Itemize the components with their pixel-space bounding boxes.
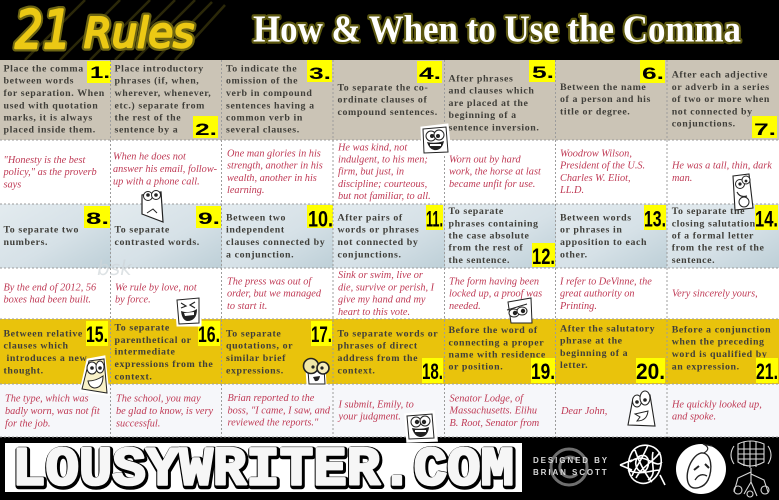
icon: tall face, rule 7 [733, 174, 753, 210]
rule 19 example: Massachusetts. Elihu [448, 406, 537, 417]
rule 2 text: etc.) separate from [114, 100, 205, 111]
rule 12 text: phrases containing [448, 218, 539, 229]
rule 2 example: answer his email, follow- [113, 164, 218, 175]
rule 4 text: To separate the co- [338, 82, 428, 93]
rule 11 text: After pairs of [338, 212, 403, 223]
rule 20 panel [556, 319, 667, 437]
rule 14 text: from the rest of the [672, 243, 765, 254]
rule 12 example: The form having been [449, 276, 539, 287]
rule 11 panel [333, 204, 445, 319]
title: 21 Rules: 21 [15, 0, 71, 61]
rule 6 example: Woodrow Wilson, [560, 148, 632, 159]
rule 3 example: learning. [227, 185, 264, 196]
number 2 badge [193, 116, 218, 139]
rule 6 text: of a person and his [560, 94, 651, 105]
rule 6 example: LL.D. [559, 185, 584, 196]
rule 15 text: introduces a new [6, 353, 88, 364]
rule 16 example: The school, you may [116, 394, 201, 405]
rule 17 example: boss, "I came, I saw, and [228, 405, 331, 416]
icon: scribble ball [620, 445, 665, 485]
rule 19 text: or position. [448, 362, 503, 373]
rule 1 example: "Honesty is the best [4, 155, 86, 166]
rule 16 text: intermediate [114, 347, 175, 358]
icon: copyright symbol [551, 449, 587, 485]
rule 17 text: expressions. [226, 365, 284, 376]
rule 12 example: locked up, a proof was [449, 289, 542, 300]
rule 16 text: expressions from the [114, 359, 213, 370]
rule 5 text: After phrases [448, 74, 513, 85]
rule 15 example: The type, which was [5, 394, 89, 405]
rule 17 text: similar brief [226, 353, 286, 364]
rule 9 panel [111, 204, 222, 319]
number 9 badge: 9. [198, 210, 220, 228]
rule 18 example: your judgment. [338, 412, 401, 423]
rule 5 panel [445, 60, 556, 204]
rule 4 panel [333, 60, 445, 204]
rule 10 example: The press was out of [227, 276, 313, 287]
rule 20 text: letter. [560, 360, 588, 371]
rule 5 text: are placed at the [448, 98, 528, 109]
rule 12 panel [445, 204, 556, 319]
number 15 badge: 15. [86, 322, 108, 347]
rule 1 example: policy," as the proverb [2, 167, 97, 178]
rule 21 text: when the preceding [672, 337, 765, 348]
rule 2 text: wherever, whenever, [114, 88, 211, 99]
rule 5 text: and clauses which [448, 86, 534, 97]
rule 11 example: Sink or swim, live or [338, 270, 424, 281]
decorative streaks behind title [25, 0, 225, 60]
rule 17 panel [222, 319, 333, 437]
rule 7 example: He was a tall, thin, dark [671, 161, 772, 172]
rule 16 example: be glad to know, is very [116, 406, 213, 417]
rule 3 example: strength, another in his [227, 161, 323, 172]
rule 13 text: or phrases in [560, 225, 622, 236]
icon: smiling face, rule 18 [406, 412, 436, 441]
rule 5 example: became unfit for use. [449, 179, 535, 190]
rule 15 example: for the job. [5, 418, 50, 429]
rule 14 text: closing salutation [672, 218, 756, 229]
rule 3 text: verb in compound [226, 88, 312, 99]
number 17 badge: 17. [311, 322, 332, 347]
rule 1 text: used with quotation [4, 100, 98, 111]
icon: smiling face, rule 4 [422, 125, 450, 155]
rule 12 text: from the rest of [448, 243, 523, 254]
rule 7 text: or adverb in a series [672, 82, 770, 93]
rule 4 example: indulgent, to his men; [338, 154, 428, 165]
number 1 badge [87, 61, 111, 83]
rule 4 text: ordinate clauses of [338, 95, 427, 106]
rule 13 example: I refer to DeVinne, the [559, 276, 652, 287]
rule 19 example: Senator Lodge, of [450, 393, 525, 404]
rule 12 example: needed. [449, 301, 481, 312]
rule 6 text: Between the name [560, 82, 646, 93]
rule 1 example: says [4, 179, 21, 190]
rule 11 example: die, survive or perish, I [338, 282, 435, 293]
title: How and When to Use the Comma: How & When to Use the Comma [253, 8, 741, 50]
rule 14 text: of a formal letter [672, 231, 754, 242]
rule 7 example: man. [672, 173, 692, 184]
number 18 badge: 18. [422, 359, 443, 384]
number 4 badge: 4. [419, 65, 441, 83]
rule 3 text: several clauses. [226, 124, 300, 136]
icon: glasses face, rule 17 [304, 358, 329, 384]
rule 13 example: Printing. [559, 301, 597, 312]
number 11 badge: 11. [426, 206, 443, 232]
rule 17 example: reviewed the reports." [228, 418, 319, 429]
number 2 badge: 2. [195, 121, 217, 139]
rule 8 example: boxes had been built. [4, 295, 91, 306]
rule 2 text: the rest of the [114, 112, 181, 123]
title: 21 Rules [15, 0, 194, 61]
rule 7 text: not connected by [672, 106, 753, 117]
rule 12 text: To separate [448, 206, 504, 217]
rule 21 example: He quickly looked up, [671, 399, 762, 410]
number 13 badge: 13. [644, 206, 666, 232]
number 5 badge [529, 60, 555, 82]
icon: laughing face, rule 9 example [176, 297, 200, 325]
rule 1 text: for separation. When [4, 88, 105, 99]
title: 21 Rules: Rules [84, 9, 194, 57]
rule 14 text: sentence. [672, 255, 715, 266]
title: 21 Rules: Rules [84, 9, 194, 57]
rule 18 text: To separate words or [338, 328, 438, 339]
rule 8 example: By the end of 2012, 56 [4, 282, 97, 293]
rule 10 text: clauses connected by [226, 237, 325, 248]
rule 21 text: an expression. [672, 361, 740, 372]
logo panel: LOUSYWRITER.COM: LOUSYWRITER.COM [12, 438, 514, 500]
rule 17 text: quotations, or [226, 341, 293, 352]
rule 1 panel [0, 60, 111, 204]
rule 5 example: work, the horse at last [449, 167, 542, 178]
rule 16 text: To separate [114, 323, 170, 334]
rule 2 text: Place introductory [114, 64, 204, 74]
watermark scribble: bsk [97, 256, 133, 280]
rule 12 text: the case absolute [448, 231, 529, 242]
rule 6 example: Charles W. Eliot, [560, 173, 631, 184]
rule 3 panel [222, 60, 333, 204]
rule 11 text: not connected by [338, 237, 418, 248]
rule 14 example: Very sincerely yours, [672, 289, 758, 300]
rule 2 example: When he does not [113, 152, 187, 163]
rule 3 example: wealth, another in his [227, 173, 317, 184]
rule 17 text: To separate [226, 328, 281, 339]
rule 4 example: He was kind, not [337, 142, 408, 153]
rule 3 text: To indicate the [226, 64, 297, 74]
header banner [15, 0, 741, 61]
number 6 badge [640, 60, 665, 83]
number 3 badge [307, 60, 332, 83]
rule 3 text: common verb in [226, 112, 303, 123]
rule 8 text: numbers. [4, 237, 48, 248]
icon: wired robot tree [731, 441, 771, 497]
rule 19 panel [445, 319, 556, 437]
rule 9 example: We rule by love, not [115, 282, 198, 293]
rule 18 text: phrases of direct [338, 341, 418, 352]
rule 1 text: between words [4, 76, 74, 87]
rule 15 panel [0, 319, 111, 437]
number 1 badge: 1. [90, 64, 110, 82]
rule 13 text: other. [560, 249, 588, 260]
rule 5 text: beginning of a [448, 110, 517, 121]
rule 1 text: marks, it is always [4, 112, 93, 123]
number 7 badge: 7. [754, 121, 776, 139]
rule 11 text: conjunctions. [338, 249, 402, 260]
number 16 badge: 16. [198, 322, 220, 347]
rule 13 panel [556, 204, 667, 319]
rule 12 text: the sentence. [448, 255, 510, 266]
rule 7 panel [667, 60, 779, 204]
rule 1 text: placed inside them. [4, 124, 96, 136]
rule 15 text: clauses which [4, 341, 69, 352]
rule 9 example: by force. [115, 295, 151, 306]
rule 13 text: Between words [560, 212, 632, 223]
rule 21 panel [667, 319, 779, 437]
rule 18 text: address from the [338, 353, 418, 364]
rule 7 text: conjunctions. [672, 119, 736, 130]
number 19 badge: 19. [531, 359, 555, 384]
rule 15 text: thought. [4, 365, 44, 376]
number 4 badge [417, 61, 442, 83]
rule 3 text: sentences having a [226, 100, 315, 111]
designer credit: BRIAN SCOTT [533, 468, 609, 477]
rule 19 text: Before the word of [448, 325, 538, 336]
number 3 badge: 3. [309, 65, 331, 83]
number 5 badge: 5. [532, 64, 554, 82]
number 20 badge: 20. [636, 359, 665, 384]
rule 13 text: apposition to each [560, 237, 647, 248]
rule 17 example: Brian reported to the [228, 393, 315, 404]
rule 5 example: Worn out by hard [449, 154, 521, 165]
rule 16 text: context. [114, 371, 152, 382]
rule 11 text: words or phrases [338, 225, 419, 236]
rule 21 text: word is qualified by [672, 349, 767, 360]
rule 4 example: firm, but just, in [338, 167, 404, 178]
rule 1 text: Place the comma [4, 64, 84, 74]
title: 21 Rules: 21 [15, 0, 71, 61]
rule 16 panel [111, 319, 222, 437]
rule 4 example: discipline; courteous, [338, 179, 427, 190]
number 10 badge: 10. [308, 206, 333, 232]
rule 21 example: and spoke. [672, 412, 716, 423]
rule 11 example: heart to this vote. [338, 307, 410, 318]
rule 7 text: After each adjective [672, 70, 768, 81]
rule 10 example: to start it. [227, 301, 267, 312]
rule 4 example: but not familiar, to all. [338, 191, 431, 202]
rule 7 text: of two or more when [672, 94, 770, 105]
icon: grinning face, rule 15 [81, 357, 108, 394]
rule 8 panel [0, 204, 111, 319]
rule 15 example: badly worn, was not fit [5, 406, 101, 417]
rule 10 text: independent [226, 225, 285, 236]
rule 3 text: omission of the [226, 76, 298, 87]
rule 14 text: To separate the [672, 206, 745, 217]
rule 16 example: successful. [116, 418, 160, 429]
number 12 badge: 12. [532, 244, 555, 269]
rule 9 text: contrasted words. [114, 237, 200, 248]
icon: goofy face, rule 20 [628, 391, 655, 426]
rule 11 example: give my hand and my [338, 295, 426, 306]
number 8 badge: 8. [86, 210, 109, 228]
rule 20 example: Dear John, [560, 406, 607, 417]
rule 18 text: context. [338, 365, 375, 376]
rule 10 text: a conjunction. [226, 249, 294, 260]
rule 14 panel [667, 204, 779, 319]
rule 20 text: After the salutatory [560, 323, 655, 334]
rule 16 text: parenthetical or [114, 335, 192, 346]
rule 21 text: Before a conjunction [672, 324, 771, 335]
number 6 badge: 6. [642, 65, 664, 83]
rule 10 text: Between two [226, 212, 286, 223]
rule 9 text: To separate [114, 225, 170, 236]
rule 3 example: One man glories in his [227, 148, 321, 159]
rule 18 example: I submit, Emily, to [338, 399, 414, 410]
rule 2 example: up with a phone call. [113, 176, 200, 187]
rule 6 text: title or degree. [560, 106, 630, 117]
rule 19 text: name with residence [448, 350, 546, 361]
icon: sad face in white circle [676, 444, 726, 494]
number 7 badge [752, 116, 777, 139]
rule 15 text: Between relative [4, 328, 83, 339]
rule 10 example: order, but we managed [227, 289, 322, 300]
rule 2 panel [111, 60, 222, 204]
rule 2 text: sentence by a [114, 124, 178, 136]
icon: peeking face, rule 12 example [507, 298, 532, 323]
rule 6 panel [556, 60, 667, 204]
rule 4 text: compound sentences. [338, 107, 438, 118]
designer credit: DESIGNED BY [533, 456, 609, 465]
rule 20 text: phrase at the [560, 336, 623, 347]
rule 18 panel [333, 319, 445, 437]
rule 6 example: President of the U.S. [559, 161, 645, 172]
rule 5 text: sentence inversion. [448, 122, 539, 133]
rule 13 example: great authority on [560, 289, 635, 300]
rule 8 text: To separate two [4, 225, 79, 236]
rule 19 example: B. Root, Senator from [450, 418, 539, 429]
rule 19 text: connecting a proper [448, 338, 544, 349]
rule 20 text: beginning of a [560, 348, 628, 359]
icon: frowning face, rule 9 [142, 190, 163, 222]
rule 10 panel [222, 204, 333, 319]
rule 2 text: phrases (if, when, [114, 76, 199, 87]
footer [5, 438, 771, 500]
